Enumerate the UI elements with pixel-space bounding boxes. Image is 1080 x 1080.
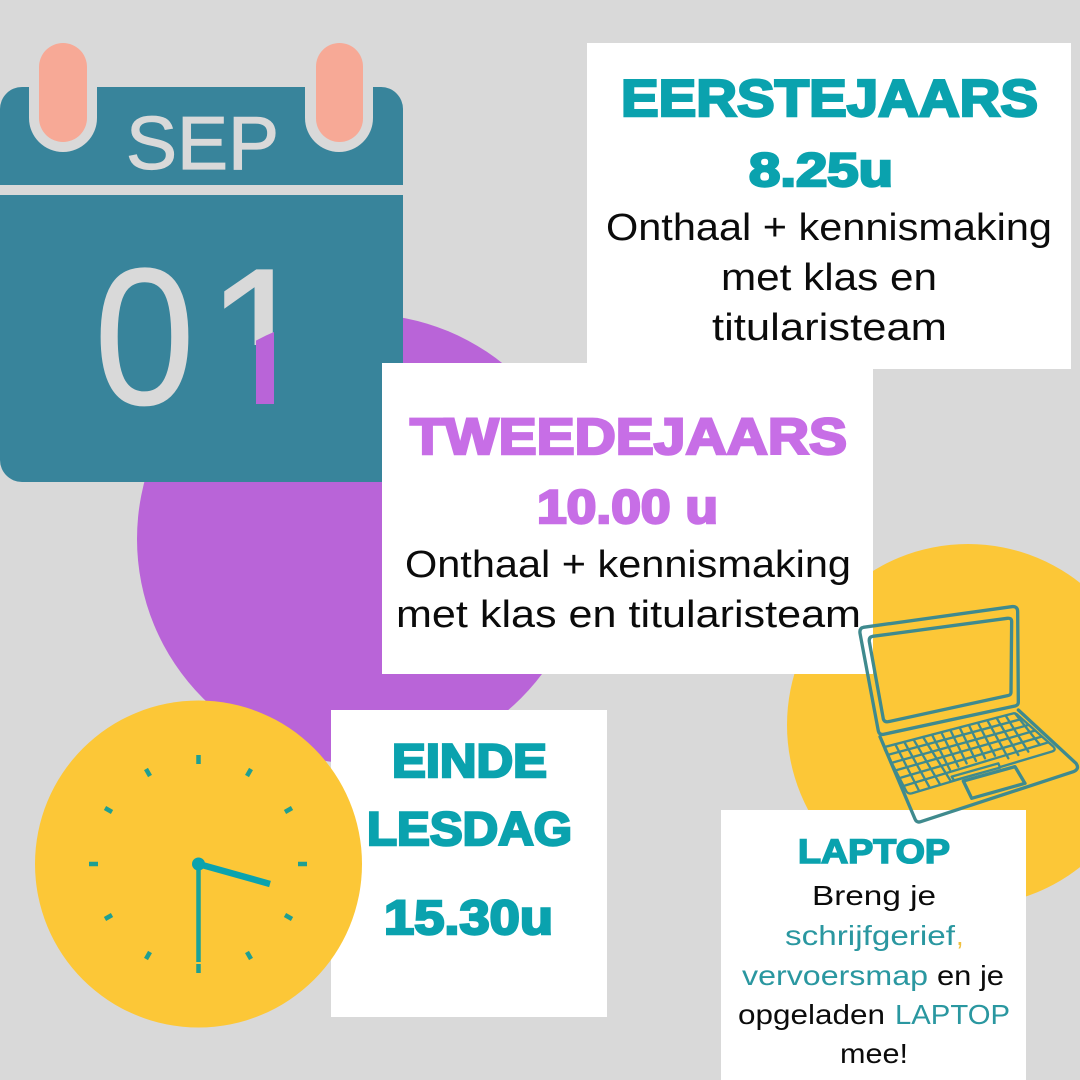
panel: laptop [721, 810, 1026, 1080]
laptop instructions: mee! [840, 1038, 908, 1069]
description [606, 207, 1052, 349]
time: 10.00 u: 10.00 u [537, 480, 718, 533]
time: 8.25u: 8.25u [749, 143, 893, 196]
description: met klas en titularisteam [396, 594, 861, 636]
time: 15.30u: 15.30u [384, 892, 553, 945]
icon: calendar: 0 [94, 228, 195, 446]
icon: calendar: 1 [206, 228, 314, 446]
description: titularisteam [712, 307, 947, 349]
description: Onthaal + kennismaking [606, 207, 1052, 249]
description: Onthaal + kennismaking [405, 544, 851, 586]
panel: einde lesdag [331, 710, 607, 1017]
description: met klas en [721, 257, 937, 299]
heading: einde lesdag [367, 734, 572, 855]
heading: einde lesdag: EINDE [392, 734, 547, 787]
panel: eerstejaars [587, 43, 1071, 369]
heading: tweedejaars: TWEEDEJAARS [410, 408, 847, 465]
laptop instructions: en je [937, 960, 1004, 991]
icon: calendar [0, 40, 403, 482]
laptop instructions: vervoersmap [742, 960, 928, 991]
heading: laptop: LAPTOP [798, 833, 950, 871]
icon: clock [35, 700, 362, 1028]
laptop instructions: LAPTOP [895, 999, 1010, 1030]
laptop instructions [738, 880, 1010, 1069]
icon: calendar: SEP [126, 101, 279, 185]
laptop instructions: Breng je [812, 880, 936, 911]
panel: tweedejaars [382, 363, 873, 674]
laptop instructions: , [956, 920, 964, 951]
icon: laptop [860, 607, 1077, 822]
laptop instructions: opgeladen [738, 999, 885, 1030]
purple circle [137, 314, 587, 764]
heading: eerstejaars: EERSTEJAARS [621, 70, 1038, 128]
heading: einde lesdag: LESDAG [367, 802, 572, 855]
description [396, 544, 861, 636]
yellow circle right [787, 544, 1080, 906]
laptop instructions: schrijfgerief [785, 920, 955, 951]
